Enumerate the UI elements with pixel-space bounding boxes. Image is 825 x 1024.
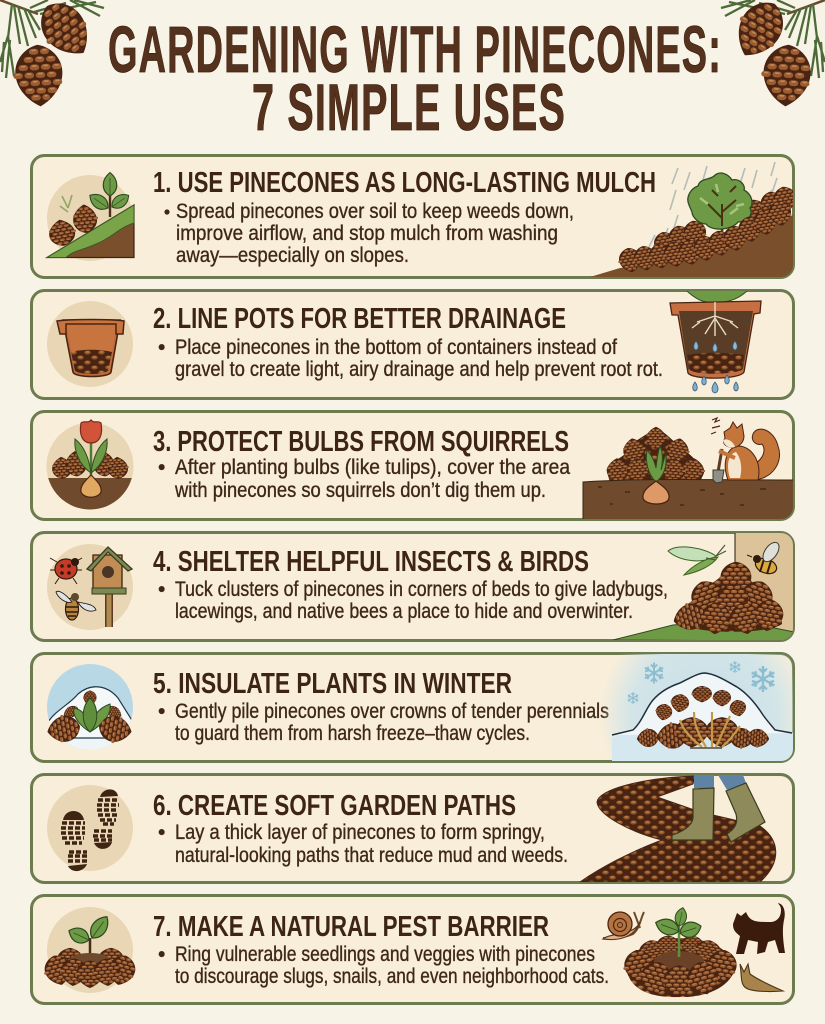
illustration: winding cone path with boots bbox=[580, 775, 776, 882]
heading: 5. INSULATE PLANTS IN WINTER bbox=[153, 668, 512, 700]
icon: seedling with ring of cones bbox=[42, 907, 138, 993]
text block: • bbox=[158, 336, 165, 359]
illustration: snowy mound over cones bbox=[600, 654, 794, 762]
illustration: cone pile with lacewing and bee bbox=[613, 533, 794, 641]
text block: Gently pile pinecones over crowns of tender perennials bbox=[175, 700, 609, 723]
decoration: top-left pine branch and cones bbox=[0, 0, 104, 108]
text block bbox=[158, 943, 609, 988]
panel: use 6 paths bbox=[32, 774, 794, 882]
text block: • bbox=[158, 700, 165, 723]
icon: right boot bbox=[726, 783, 765, 842]
heading: 6. CREATE SOFT GARDEN PATHS bbox=[153, 790, 516, 822]
title: 7 SIMPLE USES bbox=[252, 70, 566, 144]
icon: snow-covered plant bbox=[45, 664, 134, 752]
text block: • bbox=[158, 821, 165, 844]
panel: use 1 mulch bbox=[32, 156, 798, 278]
text block: to discourage slugs, snails, and even neighborhood cats. bbox=[175, 965, 609, 988]
text block: Lay a thick layer of pinecones to form springy, bbox=[175, 821, 545, 844]
heading: 3. PROTECT BULBS FROM SQUIRRELS bbox=[153, 426, 569, 458]
heading: 4. SHELTER HELPFUL INSECTS & BIRDS bbox=[153, 546, 589, 578]
text block: gravel to create light, airy drainage and help prevent root rot. bbox=[175, 358, 663, 381]
text block: improve airflow, and stop mulch from washing bbox=[176, 222, 558, 245]
text block: Tuck clusters of pinecones in corners of beds to give ladybugs, bbox=[175, 578, 668, 601]
icon: birdhouse ladybug bee bbox=[47, 544, 133, 630]
illustration: cone ring and seedling bbox=[622, 907, 739, 998]
text block: • bbox=[158, 943, 165, 966]
icon: cat bbox=[733, 903, 785, 954]
panel: use 2 drainage bbox=[32, 290, 794, 398]
icon: cones on slope with sprout bbox=[47, 173, 134, 261]
heading: 2. LINE POTS FOR BETTER DRAINAGE bbox=[153, 303, 566, 335]
text block: to guard them from harsh freeze–thaw cycles. bbox=[175, 722, 530, 745]
illustration: bush on slope with cones in rain bbox=[590, 162, 798, 277]
icon: boot prints bbox=[47, 785, 133, 871]
panel: use 3 squirrels bbox=[32, 412, 794, 520]
heading: 1. USE PINECONES AS LONG-LASTING MULCH bbox=[153, 167, 656, 199]
icon: tulip with cones bbox=[46, 420, 134, 512]
illustration: bulb under cone mound with squirrel bbox=[583, 418, 794, 520]
text block: Ring vulnerable seedlings and veggies with pinecones bbox=[175, 943, 595, 966]
panel: use 5 winter bbox=[32, 654, 794, 762]
text block bbox=[158, 700, 609, 745]
text block: After planting bulbs (like tulips), cover the area bbox=[175, 456, 570, 479]
text block: Spread pinecones over soil to keep weeds down, bbox=[176, 200, 574, 223]
text block: Place pinecones in the bottom of containers instead of bbox=[175, 336, 617, 359]
text block bbox=[164, 200, 574, 267]
icon: squirrel with shovel bbox=[711, 418, 780, 483]
icon: bee bbox=[746, 542, 780, 574]
text block: lacewings, and native bees a place to hide and overwinter. bbox=[175, 600, 633, 623]
text block: • bbox=[158, 456, 165, 479]
icon: left boot bbox=[672, 788, 714, 840]
text block bbox=[158, 578, 668, 623]
icon: pot lined with cones bbox=[47, 301, 133, 387]
text block: • bbox=[158, 578, 165, 601]
icon: snail bbox=[603, 912, 644, 940]
illustration: potted plant with cone drainage bbox=[670, 290, 761, 393]
text block: natural-looking paths that reduce mud and weeds. bbox=[175, 844, 568, 867]
icon: lacewing bbox=[668, 545, 726, 575]
text block: away—especially on slopes. bbox=[176, 244, 409, 267]
text block bbox=[158, 456, 570, 502]
text block bbox=[158, 821, 568, 867]
text block bbox=[158, 336, 663, 381]
panel: use 4 shelter bbox=[32, 532, 794, 641]
decoration: top-right pine branch and cones bbox=[721, 0, 825, 108]
heading: 7. MAKE A NATURAL PEST BARRIER bbox=[153, 911, 549, 943]
title bbox=[108, 12, 722, 144]
panel: use 7 pest barrier bbox=[32, 896, 794, 1004]
icon: slug bbox=[740, 964, 783, 992]
text block: with pinecones so squirrels don’t dig them up. bbox=[174, 479, 546, 502]
